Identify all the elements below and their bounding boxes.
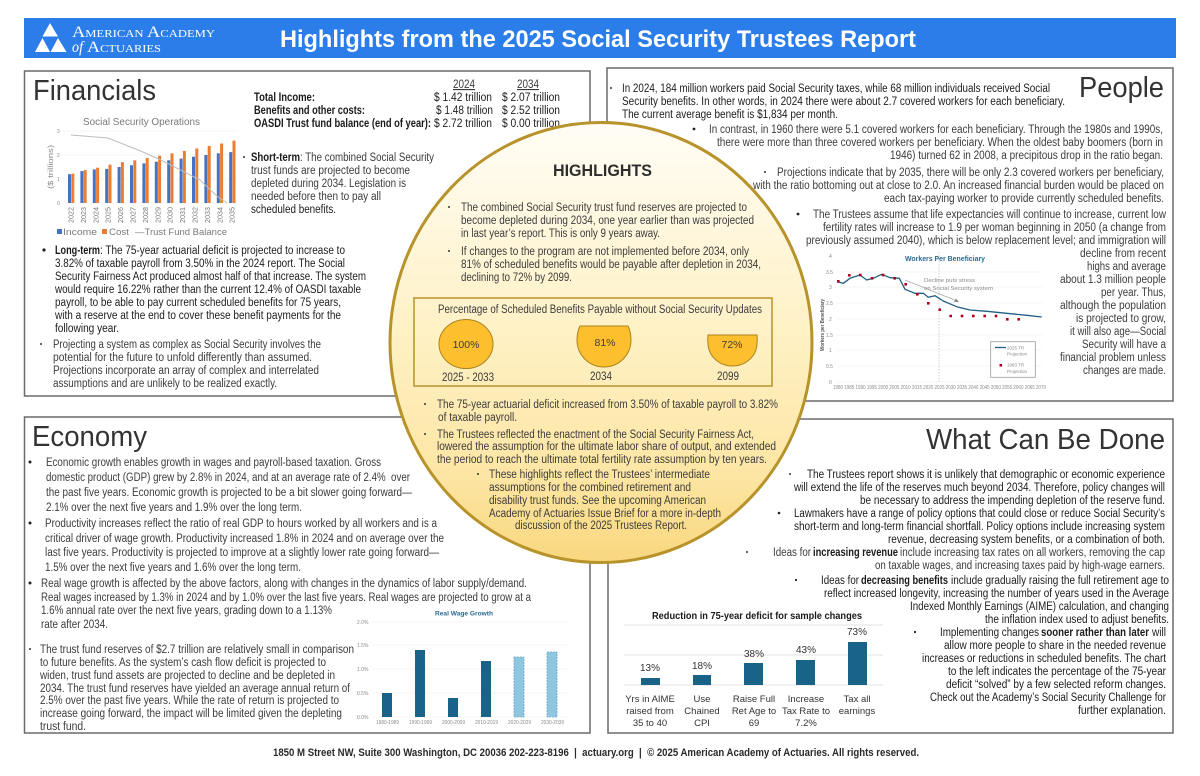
- chart: Real Wage Growth: 2020-2029: [508, 720, 531, 726]
- chart legend: 2025 TR: [1007, 346, 1025, 350]
- panel: what can be done: [608, 419, 1173, 733]
- chart: Social Security Operations: [46, 117, 238, 237]
- chart: reduction in 75-year deficit: earnings: [839, 706, 875, 717]
- text: trust fund reserves: [29, 644, 354, 733]
- financial table: Total Income:: [254, 92, 315, 104]
- text: increasing revenue: Ideas for: [773, 547, 811, 559]
- chart: Social Security Operations: 2030: [168, 207, 175, 223]
- text: increasing revenue: increasing revenue: [813, 547, 898, 559]
- chart: Real Wage Growth: 1.5%: [357, 643, 369, 649]
- highlights circle: [390, 122, 812, 562]
- text: decreasing benefits: the inflation index used to adjust benefits.: [985, 614, 1169, 626]
- chart: Real Wage Growth: 2000-2009: [442, 720, 465, 726]
- text: trust fund reserves: trust fund.: [40, 721, 86, 733]
- panel: economy: [24, 417, 590, 733]
- chart: Social Security Operations: 2027: [130, 207, 138, 223]
- text: depletion highlights: If changes to the program are not implemented before 2034, only: [461, 246, 749, 258]
- icon: partial circle 81%: [577, 326, 631, 367]
- text: increasing revenue: include increasing tax rates on all workers, removing the cap: [900, 547, 1165, 559]
- chart: Workers Per Beneficiary: [820, 252, 1046, 391]
- icon: full circle 100%: 100%: [453, 339, 479, 351]
- text: projecting: Projecting a system as complex as Social Security involves the: [53, 339, 321, 351]
- chart: Social Security Operations: 2035: [230, 207, 237, 223]
- text: short-term: Short-term: [251, 152, 300, 164]
- footer: 1850 M Street NW, Suite 300 Washington, DC 20036 202-223-8196 | actuary.org | © 2025 American Academy of Actuaries. All rights reserved.: [273, 747, 919, 759]
- text: sooner rather than later: deficit “solved” by a few selected reform changes.: [946, 679, 1166, 691]
- chart: Social Security Operations: 2024: [93, 207, 100, 223]
- text: short-term: [243, 152, 434, 216]
- chart: Real Wage Growth: Real Wage Growth: [435, 610, 493, 618]
- chart: Social Security Operations: 2023: [81, 207, 88, 223]
- financial table: Benefits and other costs:: [254, 105, 365, 117]
- text: projecting: assumptions and are unlikely to be realized exactly.: [53, 378, 277, 390]
- chart: Real Wage Growth: 2.0%: [357, 620, 369, 626]
- text: workers and beneficiaries: decline from recent: [1080, 248, 1167, 260]
- heading: Financials: Financials: [33, 75, 156, 107]
- financial table: $ 2.72 trillion: [434, 118, 492, 130]
- chart: Real Wage Growth: 2030-2039: [541, 720, 564, 726]
- text: intermediate assumptions note: discussion of the 2025 Trustees Report.: [515, 520, 687, 532]
- year labels: 2034: [590, 371, 613, 383]
- text: long-term: 3.82% of taxable payroll from 3.50% in the 2024 report. The Social: [55, 258, 345, 270]
- chart: reduction in 75-year deficit: Increase: [788, 694, 824, 705]
- chart legend: Projection: [1007, 352, 1028, 356]
- text: real wage growth: Real wage growth is affected by the above factors, along with changes in the dynamics of labor supply/demand.: [41, 578, 527, 590]
- text: decreasing benefits: Ideas for: [821, 575, 859, 587]
- chart: Social Security Operations: —Trust Fund Balance: [135, 227, 227, 237]
- text: productivity: Productivity increases reflect the ratio of real GDP to hours worked by all workers and is a: [45, 518, 438, 530]
- text: workers and beneficiaries: financial problem unless: [1060, 352, 1166, 364]
- text: economic growth: Economic growth enables growth in wages and payroll-based taxation. Gross: [46, 457, 381, 469]
- chart: reduction in 75-year deficit: 13%: [640, 663, 660, 674]
- text: decreasing benefits: [795, 575, 1169, 626]
- chart: reduction in 75-year deficit: 18%: [692, 661, 712, 672]
- text: projecting: [40, 339, 321, 390]
- chart: Workers Per Beneficiary: 0.5: [826, 364, 833, 370]
- text: actuarial deficit and assumptions: lowered the assumption for the ultimate labor share of output, and extended: [437, 441, 776, 453]
- chart: Social Security Operations: 2: [57, 153, 60, 159]
- arrow: decline annotation: [905, 278, 993, 302]
- text: workers and beneficiaries: highs and average: [1087, 261, 1166, 273]
- text: intermediate assumptions note: Academy of Actuaries Issue Brief for a more in-depth: [489, 508, 721, 520]
- chart: Social Security Operations: ($ trillions): [46, 144, 55, 189]
- chart: Workers Per Beneficiary: 3: [829, 285, 832, 291]
- text: sooner rather than later: sooner rather than later: [1041, 627, 1149, 639]
- text: intermediate assumptions note: [477, 469, 721, 532]
- heading: What Can Be Done: What Can Be Done: [926, 424, 1165, 456]
- chart: reduction in 75-year deficit: raised from: [626, 706, 674, 717]
- text: long-term: would require 16.22% rather than the current 12.4% of OASDI taxable: [54, 284, 361, 296]
- text: sooner rather than later: further explanation.: [1078, 705, 1166, 717]
- text: trust fund reserves: 2034. The trust fund reserves have yielded an average annual return of: [40, 683, 351, 695]
- financial table: $ 0.00 trillion: [502, 118, 560, 130]
- text: productivity: [28, 518, 444, 574]
- text: economic growth: [28, 457, 412, 514]
- text: workers and beneficiaries: although the population: [1060, 300, 1166, 312]
- text: real wage growth: [28, 578, 532, 631]
- text: economic growth: domestic product (GDP) grew by 2.8% in 2024, and at an average rate of 2.4% over: [46, 472, 410, 484]
- text: workers and beneficiaries: is projected to grow,: [1076, 313, 1166, 325]
- text: productivity: 1.5% over the next five years and 1.6% over the long term.: [45, 562, 301, 574]
- chart: reduction in 75-year deficit: Ret Age to: [732, 706, 776, 717]
- chart: Workers Per Beneficiary: Workers Per Beneficiary: [905, 256, 985, 263]
- text: projecting: potential for the future to unfold differently than assumed.: [53, 352, 312, 364]
- text: long-term: following year.: [55, 323, 119, 335]
- text: sooner rather than later: Implementing changes: [940, 627, 1039, 639]
- logo: American Academy of Actuaries: American Academy: [72, 24, 215, 41]
- financial table: 2034: [517, 79, 540, 91]
- chart: reduction in 75-year deficit: Tax all: [844, 694, 870, 705]
- logo: American Academy of Actuaries: Actuaries: [87, 39, 161, 56]
- icon: partial circle 72%: 72%: [721, 339, 743, 351]
- header banner: [24, 18, 1176, 58]
- text: actuarial deficit and assumptions: of taxable payroll.: [438, 412, 517, 424]
- icon: partial circle 81%: 81%: [594, 337, 616, 349]
- chart: Workers Per Beneficiary: 0: [829, 380, 832, 386]
- financial table: OASDI Trust fund balance (end of year):: [254, 118, 431, 130]
- logo: American Academy of Actuaries: [35, 23, 215, 56]
- panel: percentage of scheduled benefits payable: [414, 298, 772, 386]
- text: depletion highlights: declining to 72% by 2099.: [461, 272, 572, 284]
- text: economic growth: the past five years. Economic growth is projected to be a bit slower going forward—: [46, 487, 412, 499]
- text: trust fund reserves: The trust fund reserves of $2.7 trillion are relatively small in comparison: [40, 644, 354, 656]
- text: trust fund reserves: widen, trust fund assets are projected to decline and be depleted in: [39, 670, 335, 682]
- text: real wage growth: 1.6% annual rate over the next five years, grading down to a 1.13%: [41, 605, 332, 617]
- chart: Workers Per Beneficiary: 2.5: [826, 301, 833, 307]
- year labels: 2025 - 2033: [442, 372, 494, 384]
- text: short-term: trust funds are projected to become: [251, 165, 410, 177]
- text: actuarial deficit and assumptions: [424, 399, 778, 466]
- icon: partial circle 72%: [708, 335, 757, 366]
- text: economic growth: 2.1% over the next five years and 1.9% over the long term.: [46, 502, 302, 514]
- text: depletion highlights: 81% of scheduled benefits would be payable after depletion in 2034,: [461, 259, 761, 271]
- financial table: [254, 79, 560, 130]
- chart: reduction in 75-year deficit: 38%: [744, 649, 764, 660]
- text: productivity: critical driver of wage growth. Productivity increased 1.8% in 2024 and on average over the: [45, 533, 444, 545]
- text: workers and beneficiaries: Security benefits. In other words, in 2024 there were about 2.7 covered workers for each beneficiary.: [622, 96, 1065, 108]
- chart: Workers Per Beneficiary: 1.5: [826, 333, 833, 339]
- text: policy changes: [778, 469, 1165, 546]
- chart: reduction in 75-year deficit: 73%: [847, 627, 867, 638]
- text: actuarial deficit and assumptions: The 75-year actuarial deficit increased from 3.50% of taxable payroll to 3.82%: [437, 399, 778, 411]
- arrow: decline annotation: Decline puts stress: [924, 278, 976, 284]
- text: actuarial deficit and assumptions: the period to reach the ultimate total fertility rate assumption by ten years.: [437, 454, 767, 466]
- chart: Real Wage Growth: 1980-1989: [376, 720, 399, 726]
- text: sooner rather than later: increases or reductions in scheduled benefits. The chart: [922, 653, 1167, 665]
- text: decreasing benefits: decreasing benefits: [861, 575, 948, 587]
- panel: percentage of scheduled benefits payable: Percentage of Scheduled Benefits Payable without Social Security Updates: [438, 304, 762, 316]
- year labels: [442, 371, 739, 384]
- chart: Social Security Operations: Income: [63, 227, 97, 237]
- chart: Real Wage Growth: 0.5%: [357, 691, 369, 697]
- text: trust fund reserves: 2.5% over the past five years. While the rate of return is projected to: [40, 695, 339, 707]
- chart: reduction in 75-year deficit: CPI: [694, 718, 710, 729]
- heading: People: People: [1079, 72, 1164, 104]
- chart: Workers Per Beneficiary: 4: [829, 254, 832, 260]
- chart: reduction in 75-year deficit: Yrs in AIME: [625, 694, 675, 705]
- text: workers and beneficiaries: about 1.3 million people: [1060, 274, 1166, 286]
- year labels: 2099: [717, 371, 739, 383]
- text: workers and beneficiaries: it will also age—Social: [1070, 326, 1166, 338]
- financial table: 2024: [453, 79, 476, 91]
- text: projecting: Projections incorporate an array of complex and interrelated: [53, 365, 319, 377]
- panel: people: [607, 68, 1173, 401]
- text: productivity: last five years. Productivity is projected to improve at a slightly lower rate going forward—: [45, 547, 439, 559]
- financial table: $ 1.42 trillion: [434, 92, 492, 104]
- text: short-term: : The combined Social Security: [300, 152, 434, 164]
- chart: Social Security Operations: 2025: [106, 207, 113, 223]
- logo: American Academy of Actuaries: of: [72, 39, 85, 56]
- chart: Social Security Operations: 0: [57, 201, 60, 207]
- text: long-term: payroll, to be able to pay current scheduled benefits for 75 years,: [55, 297, 341, 309]
- text: workers and beneficiaries: per year. Thus,: [1101, 287, 1166, 299]
- text: short-term: needed before then to pay all: [251, 191, 381, 203]
- heading: Economy: Economy: [32, 421, 147, 453]
- chart: Workers Per Beneficiary: 3.5: [826, 270, 833, 276]
- chart: Social Security Operations: 2029: [155, 207, 162, 223]
- chart: Social Security Operations: Cost: [109, 227, 130, 237]
- icon: full circle 100%: [439, 320, 493, 368]
- text: intermediate assumptions note: These highlights reflect the Trustees’ intermediate: [489, 469, 710, 481]
- chart: Social Security Operations: 2031: [180, 207, 187, 223]
- chart: Real Wage Growth: 1990-1999: [409, 720, 432, 726]
- text: depletion highlights: in last year’s report. This is only 9 years away.: [461, 228, 660, 240]
- text: long-term: Long-term: [55, 245, 100, 257]
- financial table: $ 1.48 trillion: [436, 105, 493, 117]
- chart: Social Security Operations: 2028: [143, 207, 150, 223]
- text: workers and beneficiaries: In 2024, 184 million workers paid Social Security taxes, while 68 million individuals received Social: [622, 83, 1050, 95]
- text: depletion highlights: [448, 202, 761, 284]
- chart: reduction in 75-year deficit: 35 to 40: [633, 718, 667, 729]
- chart: Social Security Operations: 1: [57, 177, 60, 183]
- chart: reduction in 75-year deficit: Tax Rate to: [782, 706, 830, 717]
- text: short-term: depleted during 2034. Legislation is: [251, 178, 406, 190]
- chart: reduction in 75-year deficit: Chained: [684, 706, 720, 717]
- heading: HIGHLIGHTS: HIGHLIGHTS: [553, 161, 652, 180]
- text: workers and beneficiaries: [610, 83, 1167, 377]
- text: long-term: : The 75-year actuarial deficit is projected to increase to: [100, 245, 345, 257]
- text: workers and beneficiaries: changes are made.: [1083, 365, 1166, 377]
- chart: Social Security Operations: 3: [57, 129, 60, 135]
- chart: Social Security Operations: 2034: [217, 207, 224, 223]
- chart: Real Wage Growth: 0.0%: [357, 715, 369, 721]
- text: long-term: [42, 245, 366, 335]
- financial table: $ 2.07 trillion: [502, 92, 560, 104]
- text: sooner rather than later: [914, 627, 1167, 717]
- text: sooner rather than later: allow more people to share in the needed revenue: [944, 640, 1166, 652]
- text: sooner rather than later: will: [1151, 627, 1166, 639]
- chart: Workers Per Beneficiary: 1980 1985 1990 1995 2000 2005 2010 2015 2020 2025 2030 2035 2040 2045 2050 2055 2060 2065 2070: [833, 385, 1046, 391]
- chart: reduction in 75-year deficit: 7.2%: [795, 718, 817, 729]
- chart: Social Security Operations: 2026: [118, 207, 125, 223]
- text: depletion highlights: become depleted during 2034, one year earlier than was projected: [461, 215, 754, 227]
- chart: Social Security Operations: 2033: [205, 207, 212, 223]
- chart legend: Projection: [1007, 369, 1028, 374]
- arrow: decline annotation: on Social Security system: [924, 286, 993, 292]
- chart: Workers Per Beneficiary: 1: [829, 348, 832, 354]
- chart: Real Wage Growth: 2010-2019: [475, 720, 498, 726]
- main title: Highlights from the 2025 Social Security Trustees Report: [280, 26, 916, 53]
- chart: Real Wage Growth: [357, 610, 568, 726]
- chart: Social Security Operations: Social Security Operations: [83, 117, 200, 128]
- chart: reduction in 75-year deficit: [624, 610, 883, 729]
- text: sooner rather than later: to the left indicates the percentage of the 75-year: [948, 666, 1166, 678]
- text: trust fund reserves: to future benefits. As the system’s cash flow deficit is projected to: [40, 657, 326, 669]
- chart legend: 1983 TR: [1007, 362, 1025, 368]
- chart: reduction in 75-year deficit: 69: [749, 718, 759, 729]
- text: intermediate assumptions note: assumptions for the combined retirement and: [489, 482, 691, 494]
- text: policy changes: revenue, decreasing system benefits, or a combination of both.: [888, 534, 1165, 546]
- text: actuarial deficit and assumptions: The Trustees reflected the enactment of the Social Security Fairness Act,: [437, 429, 754, 441]
- text: workers and beneficiaries: 1946) turned 62 in 2008, a precipitous drop in the ratio began.: [890, 150, 1163, 162]
- text: depletion highlights: The combined Social Security trust fund reserves are projected to: [461, 202, 747, 214]
- text: short-term: scheduled benefits.: [251, 204, 336, 216]
- chart: reduction in 75-year deficit: 43%: [796, 645, 816, 656]
- text: intermediate assumptions note: disability trust funds. See the upcoming American: [489, 495, 706, 507]
- panel: financials: [24, 71, 590, 396]
- text: workers and beneficiaries: each tax-paying worker to provide currently scheduled benefits.: [884, 193, 1164, 205]
- text: long-term: Security Fairness Act produced almost half of that increase. The system: [55, 271, 366, 283]
- financial table: $ 2.52 trillion: [502, 105, 560, 117]
- text: real wage growth: Real wages increased by 1.3% in 2024 and by 1.0% over the last five years. Real wages are projected to grow at a: [41, 592, 532, 604]
- chart legend: [991, 342, 1035, 377]
- text: workers and beneficiaries: Security will have a: [1082, 339, 1167, 351]
- text: decreasing benefits: include gradually raising the full retirement age to: [951, 575, 1169, 587]
- chart: Workers Per Beneficiary: 2: [829, 317, 832, 323]
- chart: Real Wage Growth: 1.0%: [357, 667, 369, 673]
- text: real wage growth: rate after 2034.: [41, 619, 108, 631]
- chart: Social Security Operations: 2022: [68, 207, 76, 223]
- text: workers and beneficiaries: The current average benefit is $1,834 per month.: [622, 109, 838, 121]
- text: trust fund reserves: increase going forward, the impact will be limited given the depleting: [40, 708, 342, 720]
- chart: Social Security Operations: 2032: [192, 207, 200, 223]
- text: long-term: with a reserve at the end to cover these benefit payments for the: [54, 310, 341, 322]
- chart: reduction in 75-year deficit: Use: [694, 694, 710, 705]
- chart: reduction in 75-year deficit: Reduction in 75-year deficit for sample changes: [652, 610, 862, 622]
- text: increasing revenue: [746, 547, 1165, 572]
- chart: Workers Per Beneficiary: Workers per Beneficiary: [820, 299, 826, 351]
- chart: reduction in 75-year deficit: Raise Full: [733, 694, 775, 705]
